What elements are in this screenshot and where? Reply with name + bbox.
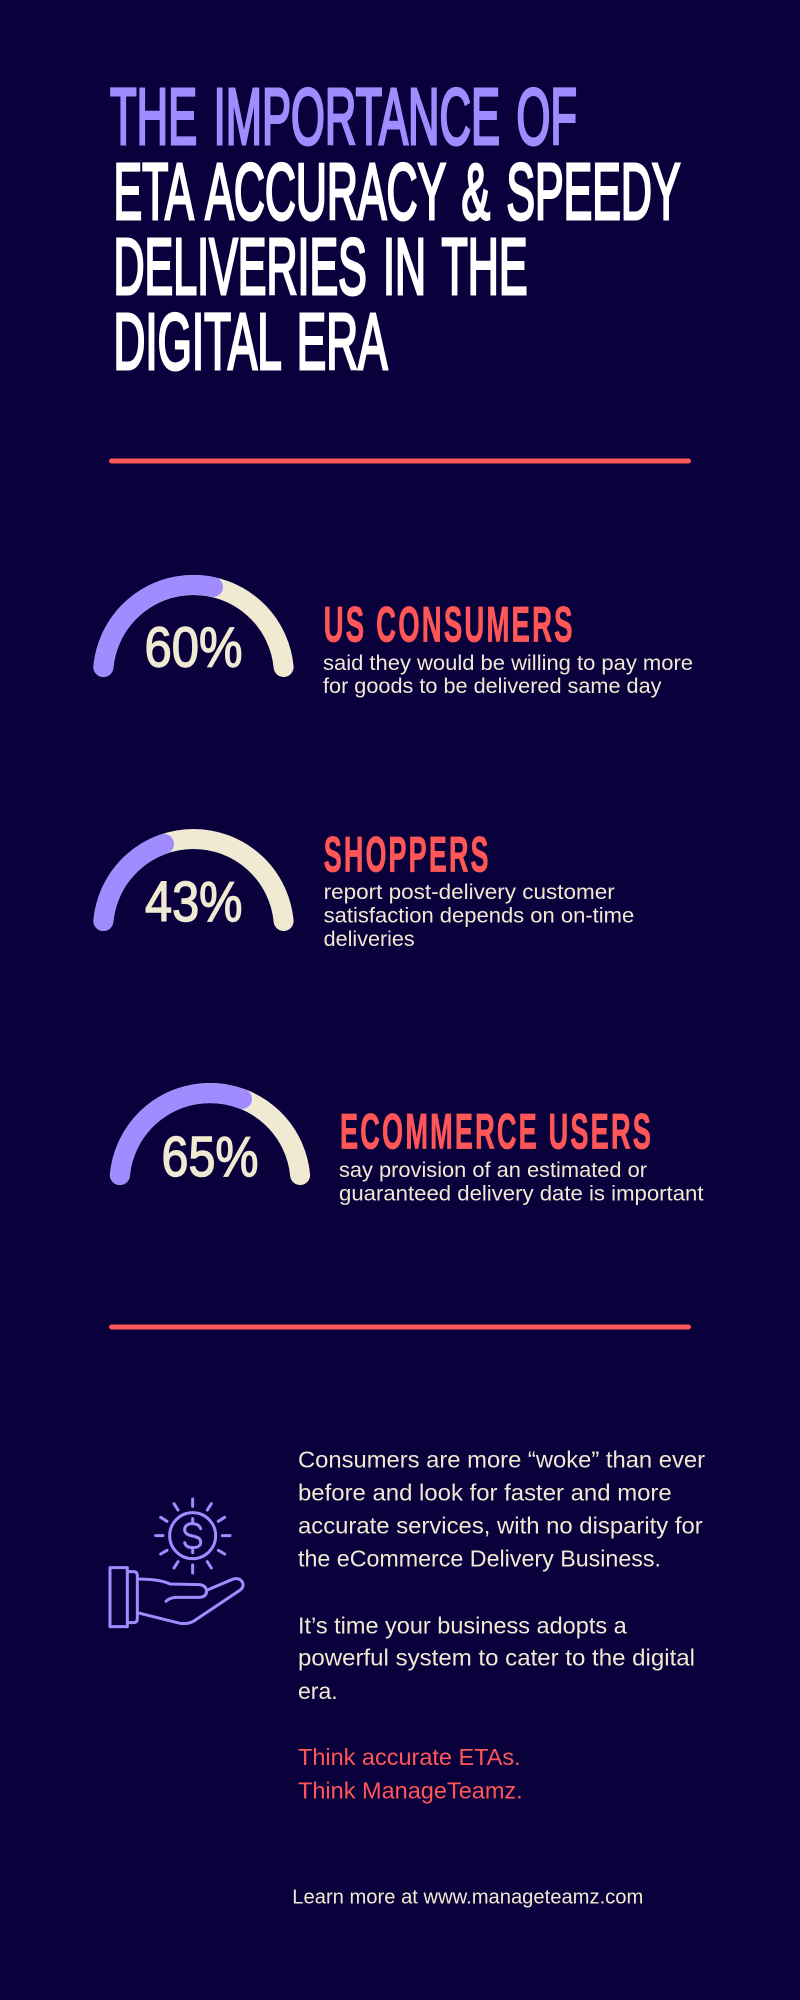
description: shoppers: deliveries bbox=[324, 928, 415, 951]
value: 43%: 43% bbox=[145, 870, 242, 934]
description: eCommerce users: guaranteed delivery date is important bbox=[339, 1183, 704, 1206]
panel: eCommerce users stat bbox=[120, 1093, 704, 1206]
text block: closing message: powerful system to cater to the digital bbox=[298, 1645, 695, 1671]
panel: US consumers stat bbox=[103, 585, 693, 698]
description: shoppers: satisfaction depends on on-time bbox=[324, 905, 634, 928]
gauge: 43% bbox=[103, 839, 284, 921]
description: eCommerce users bbox=[339, 1159, 704, 1206]
description: shoppers bbox=[324, 881, 634, 951]
title bbox=[110, 72, 680, 386]
icon: hand holding dollar coin bbox=[110, 1499, 243, 1627]
text block: closing message: It’s time your business adopts a bbox=[298, 1612, 628, 1638]
heading: US consumers: US CONSUMERS bbox=[324, 596, 575, 652]
title: DIGITAL ERA bbox=[114, 297, 388, 386]
callout: think accurate ETAs: Think accurate ETAs. bbox=[298, 1744, 521, 1770]
callout: think accurate ETAs: Think ManageTeamz. bbox=[298, 1777, 523, 1803]
text block: closing message: Consumers are more “woke” than ever bbox=[298, 1446, 705, 1472]
description: US consumers bbox=[323, 652, 693, 698]
value: 60%: 60% bbox=[144, 616, 242, 680]
description: US consumers: said they would be willing to pay more bbox=[323, 652, 693, 675]
gauge: 60% bbox=[103, 585, 284, 667]
text block: closing message: era. bbox=[298, 1678, 338, 1704]
value: 65%: 65% bbox=[162, 1125, 258, 1189]
heading: shoppers: SHOPPERS bbox=[324, 826, 491, 882]
description: eCommerce users: say provision of an estimated or bbox=[339, 1159, 647, 1182]
description: US consumers: for goods to be delivered same day bbox=[323, 675, 662, 698]
text block: closing message: accurate services, with no disparity for bbox=[298, 1513, 703, 1539]
panel: shoppers stat bbox=[103, 826, 634, 951]
text block: closing message: before and look for faster and more bbox=[298, 1480, 672, 1506]
text block: closing message bbox=[298, 1446, 705, 1704]
footer link text: Learn more at www.manageteamz.com bbox=[292, 1886, 643, 1908]
gauge: 65% bbox=[120, 1093, 300, 1175]
callout: think accurate ETAs bbox=[298, 1744, 523, 1803]
text block: closing message: the eCommerce Delivery Business. bbox=[298, 1546, 661, 1572]
description: shoppers: report post-delivery customer bbox=[324, 881, 615, 904]
